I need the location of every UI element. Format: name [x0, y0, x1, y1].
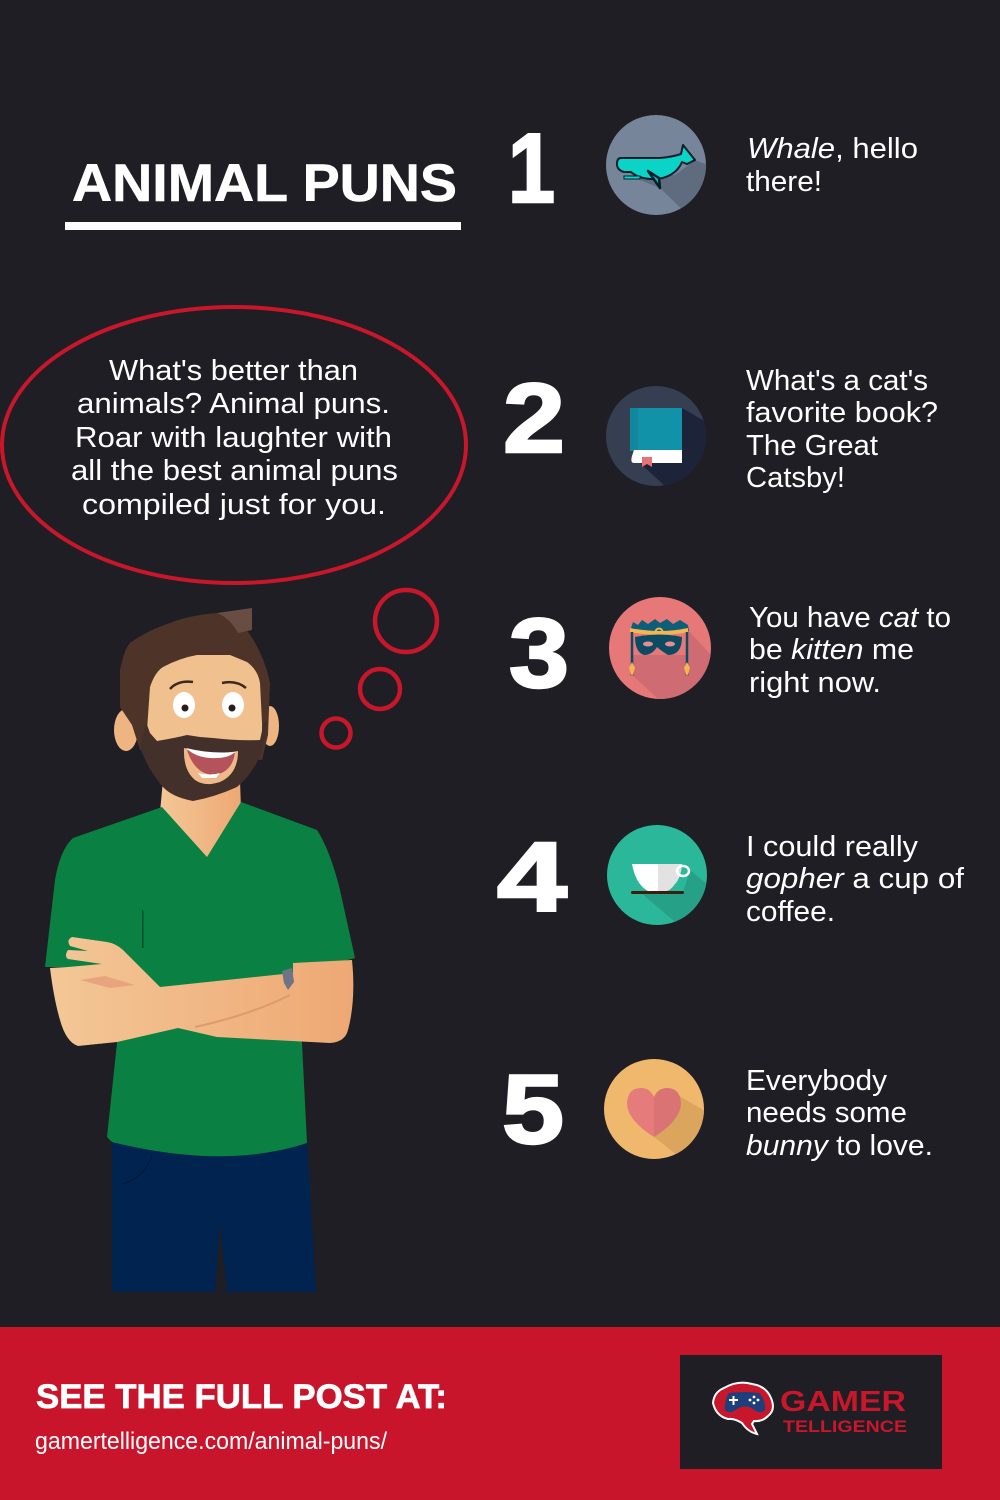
item 1 text: there!	[746, 166, 822, 198]
speech bubble	[2, 307, 466, 583]
icon: coffee cup	[607, 825, 707, 925]
item 3 number: 3	[509, 598, 569, 708]
footer band	[0, 1327, 1000, 1500]
speech bubble: compiled just for you.	[82, 489, 386, 521]
item 5 number: 5	[502, 1054, 564, 1164]
item 2 text: What's a cat's	[746, 365, 928, 397]
trousers	[112, 1140, 316, 1292]
speech bubble: Roar with laughter with	[75, 422, 392, 454]
icon: whale	[606, 115, 706, 215]
item 2 text: favorite book?	[746, 397, 938, 429]
item 5 text	[746, 1065, 933, 1162]
item 4 text: gopher a cup of	[746, 863, 965, 895]
icon: book	[606, 386, 706, 486]
face	[147, 655, 262, 750]
item 3 text: You have cat to	[749, 602, 951, 634]
item 1 number: 1	[508, 113, 555, 223]
head	[114, 608, 279, 801]
item 3 text: be kitten me	[749, 634, 914, 666]
logo	[680, 1355, 942, 1469]
icon: heart	[604, 1059, 704, 1159]
speech bubble: What's better than	[109, 355, 358, 387]
item 4 number: 4	[497, 822, 567, 932]
eyebrows	[170, 682, 246, 689]
neck	[160, 780, 241, 862]
shirt	[45, 802, 355, 1156]
item 2 text: Catsby!	[746, 462, 845, 494]
item 4 text: I could really	[746, 831, 919, 863]
item 4 text	[746, 831, 965, 928]
logo: TELLIGENCE	[783, 1417, 907, 1436]
logo wordmark: GAMER	[780, 1386, 906, 1418]
logo icon: brain with controller	[713, 1383, 773, 1434]
icon: masquerade mask	[609, 597, 711, 699]
item 4 text: coffee.	[746, 896, 835, 928]
item 2 text	[746, 365, 938, 494]
character: bearded man	[45, 608, 355, 1292]
crossed arms	[50, 937, 353, 1046]
mouth	[184, 748, 238, 784]
speech bubble: all the best animal puns	[71, 455, 398, 487]
item 5 text: Everybody	[746, 1065, 888, 1097]
item 2 number: 2	[503, 363, 565, 473]
item 1 text	[746, 133, 918, 198]
eyes	[173, 692, 244, 718]
title: ANIMAL PUNS	[72, 154, 457, 213]
beard	[140, 722, 268, 801]
pocket crease	[142, 910, 144, 948]
item 5 text: bunny to love.	[746, 1130, 933, 1162]
item 3 text: right now.	[749, 667, 881, 699]
thought bubbles	[322, 590, 437, 748]
speech bubble: animals? Animal puns.	[77, 388, 390, 420]
item 3 text	[749, 602, 951, 699]
item 2 text: The Great	[746, 430, 878, 462]
item 1 text: Whale, hello	[747, 133, 918, 165]
footer heading: SEE THE FULL POST AT:	[36, 1378, 447, 1416]
item 5 text: needs some	[746, 1097, 907, 1129]
footer url: gamertelligence.com/animal-puns/	[35, 1428, 387, 1455]
